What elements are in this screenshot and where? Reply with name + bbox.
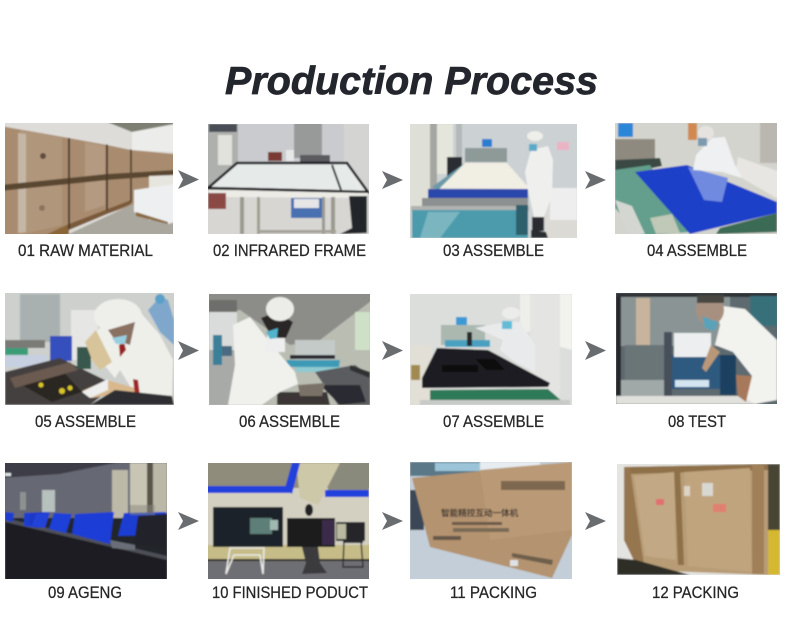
carton printed text: 智能精控互动一体机	[441, 507, 519, 518]
panel: step 10 finished product	[204, 458, 374, 602]
label: 12 PACKING	[652, 584, 739, 602]
panel: step 08 test	[612, 288, 782, 431]
panel: step 03 assemble	[405, 120, 585, 260]
arrow	[585, 512, 606, 530]
photo: worker placing white panel	[410, 124, 577, 238]
label: 01 RAW MATERIAL	[18, 242, 153, 260]
arrow	[585, 171, 606, 189]
label: 06 ASSEMBLE	[239, 413, 340, 431]
panel: step 05 assemble	[0, 288, 180, 431]
panel: step 12 packing	[612, 460, 784, 602]
photo: finished displays in showroom	[208, 463, 369, 579]
photo: worker on blue panel	[615, 123, 777, 234]
arrow	[382, 512, 403, 530]
arrow	[382, 341, 403, 360]
label: 02 INFRARED FRAME	[213, 242, 366, 260]
photo: row of blue screens in dark hall	[5, 463, 167, 579]
label: 10 FINISHED PODUCT	[212, 584, 368, 602]
photo: black frame on table	[208, 124, 369, 234]
panel: step 01 raw material	[0, 118, 180, 260]
label: 09 AGENG	[48, 584, 122, 602]
photo: worker soldering circuit board	[5, 293, 174, 405]
photo: worker on assembly line	[209, 294, 370, 405]
arrow	[178, 512, 199, 530]
photo: worker on black back panel	[410, 294, 572, 405]
photo: wooden crate	[617, 464, 780, 575]
photo: stacked cartons in warehouse	[5, 123, 173, 234]
panel: step 06 assemble	[205, 290, 375, 431]
arrow	[178, 170, 199, 189]
panel: step 02 infrared frame	[205, 120, 375, 260]
panel: step 09 ageing	[0, 458, 172, 602]
panel: step 07 assemble	[405, 290, 577, 431]
arrow	[178, 341, 199, 360]
arrow	[585, 341, 606, 360]
arrow	[382, 171, 403, 189]
label: 08 TEST	[668, 413, 726, 431]
label: 07 ASSEMBLE	[443, 413, 544, 431]
label: 04 ASSEMBLE	[647, 242, 747, 260]
panel: step 04 assemble	[610, 118, 782, 260]
photo: cardboard carton	[410, 462, 572, 579]
photo: worker testing touch screen	[616, 293, 777, 404]
label: 11 PACKING	[450, 584, 537, 602]
label: 05 ASSEMBLE	[35, 413, 136, 431]
title: Production Process	[225, 60, 598, 103]
label: 03 ASSEMBLE	[443, 242, 544, 260]
panel: step 11 packing	[405, 458, 577, 602]
